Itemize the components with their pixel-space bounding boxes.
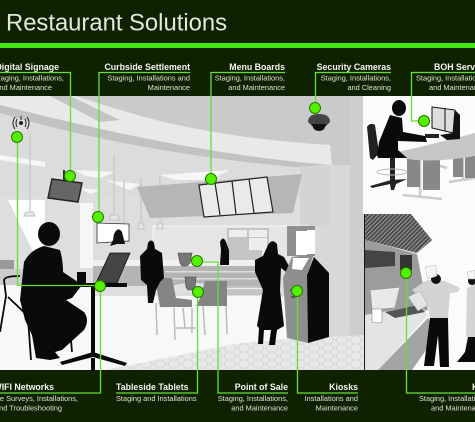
monitors (432, 107, 455, 133)
callout: curbside settlement: Maintenance (148, 83, 190, 92)
callout: tableside tablets: Tableside Tablets (116, 382, 189, 392)
kitchen counter (365, 305, 428, 370)
header rule (0, 43, 475, 48)
person standing (140, 240, 164, 303)
callout: BOH servers (412, 62, 475, 126)
callout: menu boards: and Maintenance (228, 83, 285, 92)
icon: wifi (13, 116, 29, 129)
callout: menu boards (206, 62, 285, 184)
callout: point of sale: Point of Sale (235, 382, 288, 392)
chef 1 (424, 318, 449, 367)
callout: security cameras: Security Cameras (317, 62, 391, 72)
callout: tableside tablets: Staging and Installations (116, 394, 197, 403)
callout: kiosks: Kiosks (329, 382, 358, 392)
floor (0, 285, 364, 370)
laptop (96, 253, 130, 283)
icon: menu boards (199, 177, 273, 217)
table (60, 283, 127, 371)
kiosk (283, 254, 329, 343)
callout: menu boards: Menu Boards (229, 62, 285, 72)
callout: curbside settlement: Curbside Settlement (104, 62, 190, 72)
icon: digital signage screen (48, 170, 82, 202)
callout: security cameras: Staging, Installations, (321, 74, 391, 82)
panel: restaurant scene (0, 96, 364, 371)
callout: kitchen (400, 268, 475, 412)
panel: kitchen (365, 214, 475, 370)
callout: point of sale: and Maintenance (231, 404, 288, 412)
mug (77, 272, 86, 285)
person with laptop (0, 222, 130, 371)
callout: kiosks: Installations and (305, 394, 358, 403)
callout: menu boards: Staging, Installations, (215, 74, 285, 82)
icon: tablet 1 (178, 253, 192, 266)
menu sign backing (137, 174, 302, 218)
callout: curbside settlement: Staging, Installations and (107, 74, 190, 82)
panel: back of house office (363, 96, 475, 214)
chef 2 (466, 284, 475, 337)
woman at kiosk (255, 241, 300, 345)
title: Restaurant Solutions (6, 10, 227, 36)
desk (403, 158, 475, 199)
callout: tableside tablets (116, 286, 204, 403)
hanging lights (24, 135, 163, 229)
callout: point of sale (192, 256, 288, 412)
icon: curbside monitor (97, 223, 129, 246)
seated worker (377, 100, 427, 158)
callout: digital signage (0, 62, 76, 182)
office chair (367, 124, 407, 190)
callout: kiosks: Maintenance (316, 404, 358, 412)
callout: wifi networks (0, 132, 106, 412)
person at counter (220, 238, 229, 265)
icon: security camera (308, 114, 330, 131)
callout: kiosks (292, 286, 358, 412)
hex tile floor (105, 335, 364, 370)
callout: curbside settlement (92, 62, 190, 222)
callout: point of sale: Staging, Installations, (218, 394, 288, 403)
chair (0, 276, 72, 360)
callout: security cameras: and Cleaning (347, 83, 391, 92)
table set (155, 277, 227, 340)
counter back (153, 226, 308, 266)
wall column (316, 165, 358, 337)
callout: security cameras (310, 62, 391, 114)
